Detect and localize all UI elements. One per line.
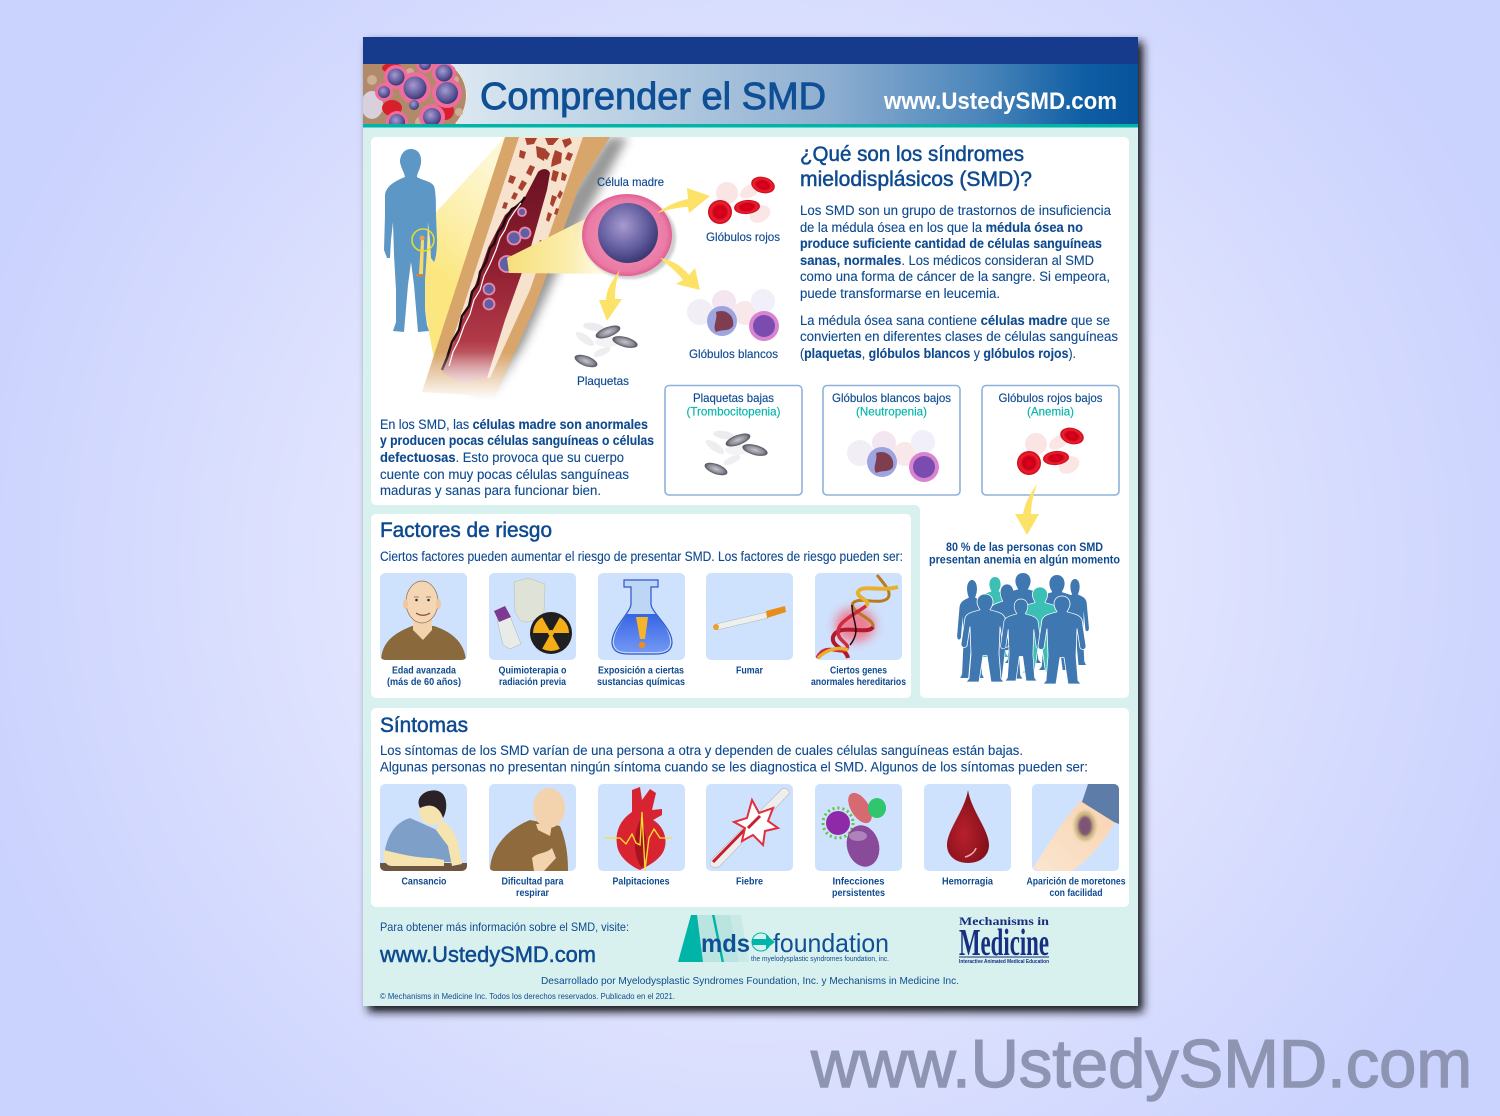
- footer: [379, 914, 1049, 1001]
- icon: stem cell: [582, 194, 676, 279]
- text: more information: Para obtener más información sobre el SMD, visite:: [380, 920, 629, 934]
- tile: bleeding: Hemorragia: [942, 876, 993, 888]
- heading: symptoms: Síntomas: [380, 714, 468, 737]
- text block: abnormal stem cells: En los SMD, las células madre son anormales: [380, 417, 648, 432]
- arrow: anemia: [1015, 484, 1039, 535]
- bone: [422, 137, 610, 397]
- tile: chemo or radiation: radiación previa: [499, 677, 566, 688]
- tile: infections: [815, 784, 902, 899]
- text block: MDS definition: produce suficiente cantidad de células sanguíneas: [800, 236, 1102, 251]
- bone shadow: [498, 137, 632, 392]
- panel: top white area with anemia column: [371, 137, 1129, 698]
- tile: inherited genes: [811, 573, 906, 688]
- logo: Mechanisms in Medicine: Mechanisms in: [959, 914, 1049, 928]
- logo: Mechanisms in Medicine: Medicine: [959, 922, 1049, 964]
- icon: red cells small: [1017, 425, 1086, 477]
- highlight circle and femur: [412, 229, 434, 276]
- icon: white blood cells: [687, 289, 779, 341]
- panel: low red cells: (Anemia): [1027, 404, 1074, 418]
- arrow: to white cells: [660, 258, 700, 290]
- label: white cells: Glóbulos blancos: [689, 347, 778, 361]
- tile: older age: [380, 573, 467, 688]
- tile: fatigue: [380, 784, 467, 888]
- text: anemia statistic: presentan anemia en algún momento: [929, 554, 1120, 566]
- logo: Mechanisms in Medicine: Interactive Animated Medical Education: [959, 959, 1049, 965]
- text block: MDS definition: de la médula ósea en los que la médula ósea no: [800, 220, 1083, 235]
- bottom fade: [422, 354, 516, 410]
- text block: MDS definition: sanas, normales. Los médicos consideran al SMD: [800, 253, 1094, 268]
- text: symptoms intro: Algunas personas no presentan ningún síntoma cuando se les diagnostica el SMD. Algunos de los síntomas pueden ser:: [380, 760, 1088, 774]
- tile: easy bruising: [1026, 784, 1126, 899]
- panel: risk factors: [371, 514, 911, 698]
- tile: chemicals: [597, 573, 685, 688]
- text block: healthy marrow: convierten en diferentes clases de células sanguíneas: [800, 329, 1118, 344]
- panel: symptoms: [371, 708, 1129, 907]
- tile: fever: Fiebre: [736, 876, 763, 888]
- icon: platelets: [573, 321, 639, 370]
- poster: [361, 37, 1138, 1006]
- text block: abnormal stem cells: y producen pocas células sanguíneas o células: [380, 433, 654, 448]
- header banner: [363, 64, 1138, 128]
- canal jagged edge: [442, 197, 525, 370]
- title: Comprender el SMD: [480, 76, 826, 118]
- tile: fever: [706, 784, 793, 888]
- text block: healthy marrow: [800, 313, 1118, 361]
- heading: risk factors: Factores de riesgo: [380, 519, 552, 542]
- header url: www.UstedySMD.com: [883, 88, 1117, 115]
- tile: inherited genes: Ciertos genes: [830, 666, 887, 676]
- panel: low red cells: Glóbulos rojos bajos: [998, 391, 1102, 405]
- poster drop shadow: [368, 42, 1143, 1012]
- marrow canal: [442, 169, 550, 384]
- text block: abnormal stem cells: cuente con muy pocas células sanguíneas: [380, 467, 629, 482]
- tile: smoking: [706, 573, 793, 676]
- text block: MDS definition: puede transformarse en leucemia.: [800, 286, 1000, 301]
- panel: low platelets: (Trombocitopenia): [686, 404, 780, 418]
- tile: smoking: Fumar: [736, 666, 763, 676]
- top navy band: [363, 37, 1138, 64]
- tile: infections: Infecciones: [832, 876, 885, 888]
- text: copyright: © Mechanisms in Medicine Inc. Todos los derechos reservados. Publicado en el 2021.: [380, 991, 675, 1001]
- yellow zoom cone from cell to stem cell: [507, 219, 610, 274]
- icon: platelets small: [703, 429, 769, 478]
- spongy bone: [442, 137, 583, 378]
- tile: palpitations: [598, 784, 685, 888]
- label: red cells: Glóbulos rojos: [706, 230, 780, 244]
- text: symptoms intro: [380, 743, 1088, 774]
- tile: chemicals: sustancias químicas: [597, 677, 685, 688]
- text block: abnormal stem cells: maduras y sanas para funcionar bien.: [380, 483, 601, 498]
- heading: what are MDS: [800, 143, 1032, 191]
- panel: low platelets: Plaquetas bajas: [693, 391, 774, 405]
- logo: Mechanisms in Medicine: [959, 914, 1049, 965]
- panel: low platelets: [665, 386, 802, 495]
- logo: MDS Foundation: mds: [701, 930, 750, 958]
- arrow: to platelets: [599, 270, 622, 321]
- text block: abnormal stem cells: [380, 417, 654, 498]
- label: platelets: Plaquetas: [577, 374, 629, 388]
- panel: low white cells: (Neutropenia): [856, 404, 927, 418]
- tile: easy bruising: con facilidad: [1050, 888, 1102, 899]
- tile: infections: persistentes: [832, 888, 885, 899]
- text block: healthy marrow: La médula ósea sana contiene células madre que se: [800, 313, 1110, 328]
- label: stem cell: Célula madre: [597, 175, 664, 189]
- text block: MDS definition: Los SMD son un grupo de trastornos de insuficiencia: [800, 203, 1111, 218]
- logo: MDS Foundation: [678, 915, 889, 963]
- text block: MDS definition: [800, 203, 1111, 301]
- icon: human silhouette: [384, 149, 437, 332]
- arrow: to red cells: [657, 188, 710, 213]
- tile: inherited genes: anormales hereditarios: [811, 677, 906, 688]
- tile: older age: (más de 60 años): [387, 677, 461, 688]
- cells in marrow: [484, 208, 530, 310]
- icon: group of people: [957, 573, 1089, 684]
- panel: low white cells: [823, 386, 960, 495]
- logo: MDS Foundation: foundation: [773, 928, 889, 958]
- text block: abnormal stem cells: defectuosas. Esto provoca que su cuerpo: [380, 450, 624, 465]
- header cell image: [363, 64, 467, 124]
- panel: low red cells: [982, 386, 1119, 495]
- icon: red blood cells: [708, 174, 777, 226]
- tile: chemo or radiation: [489, 573, 576, 688]
- footer url: www.UstedySMD.com: [379, 942, 596, 967]
- heading: what are MDS: mielodisplásicos (SMD)?: [800, 168, 1032, 191]
- tile: shortness of breath: [489, 784, 576, 899]
- tile: shortness of breath: respirar: [516, 888, 549, 899]
- watermark url: www.UstedySMD.com: [810, 1026, 1472, 1102]
- illustration: bone marrow and blood cell formation: [422, 137, 632, 397]
- logo: MDS Foundation: the myelodysplastic syndromes foundation, inc.: [751, 956, 889, 963]
- text: developed by: Desarrollado por Myelodysplastic Syndromes Foundation, Inc. y Mechanisms in Medicine Inc.: [541, 975, 959, 987]
- tile: shortness of breath: Dificultad para: [502, 876, 564, 888]
- panel: low white cells: Glóbulos blancos bajos: [832, 391, 951, 405]
- bone pores: [502, 138, 573, 248]
- heading: what are MDS: ¿Qué son los síndromes: [800, 143, 1024, 166]
- text: symptoms intro: Los síntomas de los SMD varían de una persona a otra y dependen de cuales células sanguíneas están bajas.: [380, 743, 1023, 758]
- text: anemia statistic: 80 % de las personas con SMD: [946, 542, 1103, 554]
- text block: MDS definition: como una forma de cáncer de la sangre. Si empeora,: [800, 269, 1110, 284]
- tile: bleeding: [924, 784, 1011, 888]
- tile: chemo or radiation: Quimioterapia o: [498, 666, 566, 676]
- tile: chemicals: Exposición a ciertas: [598, 666, 684, 676]
- tile: easy bruising: Aparición de moretones: [1026, 876, 1126, 888]
- tile: older age: Edad avanzada: [392, 666, 456, 676]
- text block: healthy marrow: (plaquetas, glóbulos blancos y glóbulos rojos).: [800, 346, 1076, 361]
- icon: white cells small: [847, 430, 939, 482]
- tile: fatigue: Cansancio: [402, 876, 446, 888]
- yellow zoom cone from body to bone: [425, 137, 505, 356]
- text: anemia statistic: [929, 542, 1120, 566]
- tile: palpitations: Palpitaciones: [612, 876, 670, 888]
- text: risk factor intro: Ciertos factores pueden aumentar el riesgo de presentar SMD. Los factores de riesgo pueden ser:: [380, 549, 903, 564]
